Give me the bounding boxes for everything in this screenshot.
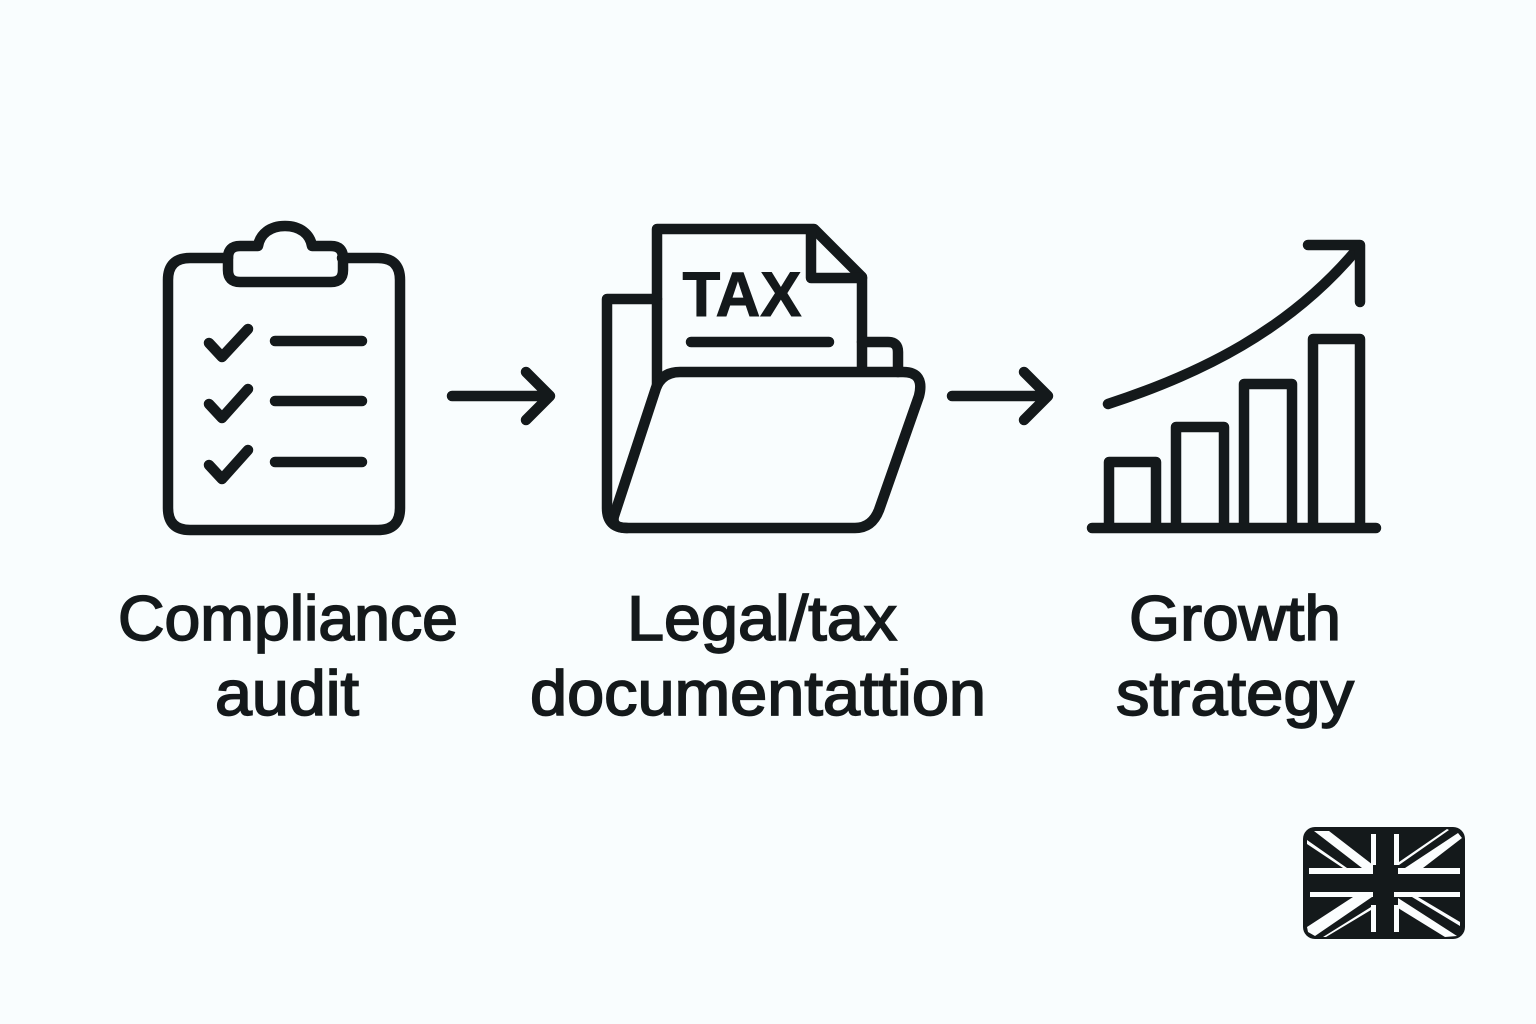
label: growth strategy: strategy bbox=[1116, 659, 1355, 729]
icon: UK flag bbox=[1303, 827, 1465, 939]
label: compliance audit: audit bbox=[215, 659, 360, 729]
icon: clipboard with checklist bbox=[168, 226, 400, 530]
arrow: documentation to growth bbox=[952, 372, 1048, 420]
label: legal/tax documentation bbox=[530, 584, 986, 729]
label: legal/tax documentation: documentattion bbox=[530, 659, 986, 729]
label: growth strategy bbox=[1116, 584, 1355, 729]
label: growth strategy: Growth bbox=[1129, 584, 1341, 654]
label: legal/tax documentation: Legal/tax bbox=[627, 584, 897, 654]
icon label: TAX: TAX bbox=[682, 260, 802, 330]
icon: growth bar chart with rising arrow bbox=[1092, 245, 1376, 528]
icon: folder with tax document bbox=[607, 229, 920, 528]
label: compliance audit: Compliance bbox=[118, 584, 458, 654]
label: compliance audit bbox=[118, 584, 458, 729]
arrow: audit to documentation bbox=[452, 372, 550, 420]
